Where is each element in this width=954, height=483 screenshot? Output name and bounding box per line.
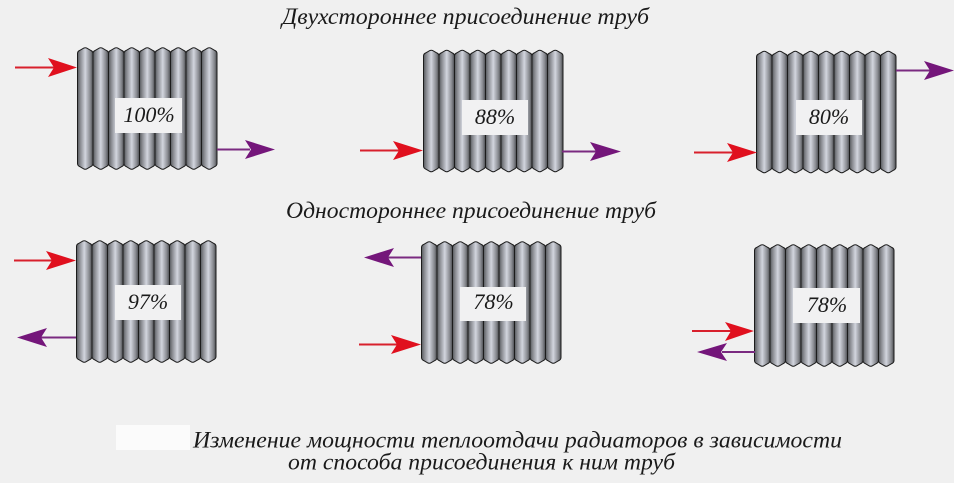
- radiator 78% left: 78%: [473, 289, 514, 314]
- radiator 88%: 88%: [475, 104, 515, 129]
- radiator 78% right: 78%: [807, 292, 847, 317]
- radiator 100%: [15, 48, 275, 169]
- radiator 80%: [694, 51, 954, 173]
- radiator 78% right: [692, 245, 894, 366]
- radiator 80%: 80%: [809, 104, 849, 129]
- caption: от способа присоединения к ним труб: [288, 450, 676, 476]
- heading: two-sided connection: Двухстороннее присоединение труб: [280, 4, 650, 30]
- radiator 88%: [360, 50, 621, 172]
- erased patch: [116, 425, 190, 450]
- radiator 97%: [14, 241, 216, 362]
- caption: Изменение мощности теплоотдачи радиаторов в зависимости: [192, 428, 842, 454]
- radiator 97%: 97%: [128, 289, 168, 314]
- radiator 78% left: [359, 242, 561, 363]
- heading: one-sided connection: Одностороннее присоединение труб: [286, 198, 657, 224]
- radiator 100%: 100%: [123, 102, 175, 127]
- caption: [192, 428, 842, 476]
